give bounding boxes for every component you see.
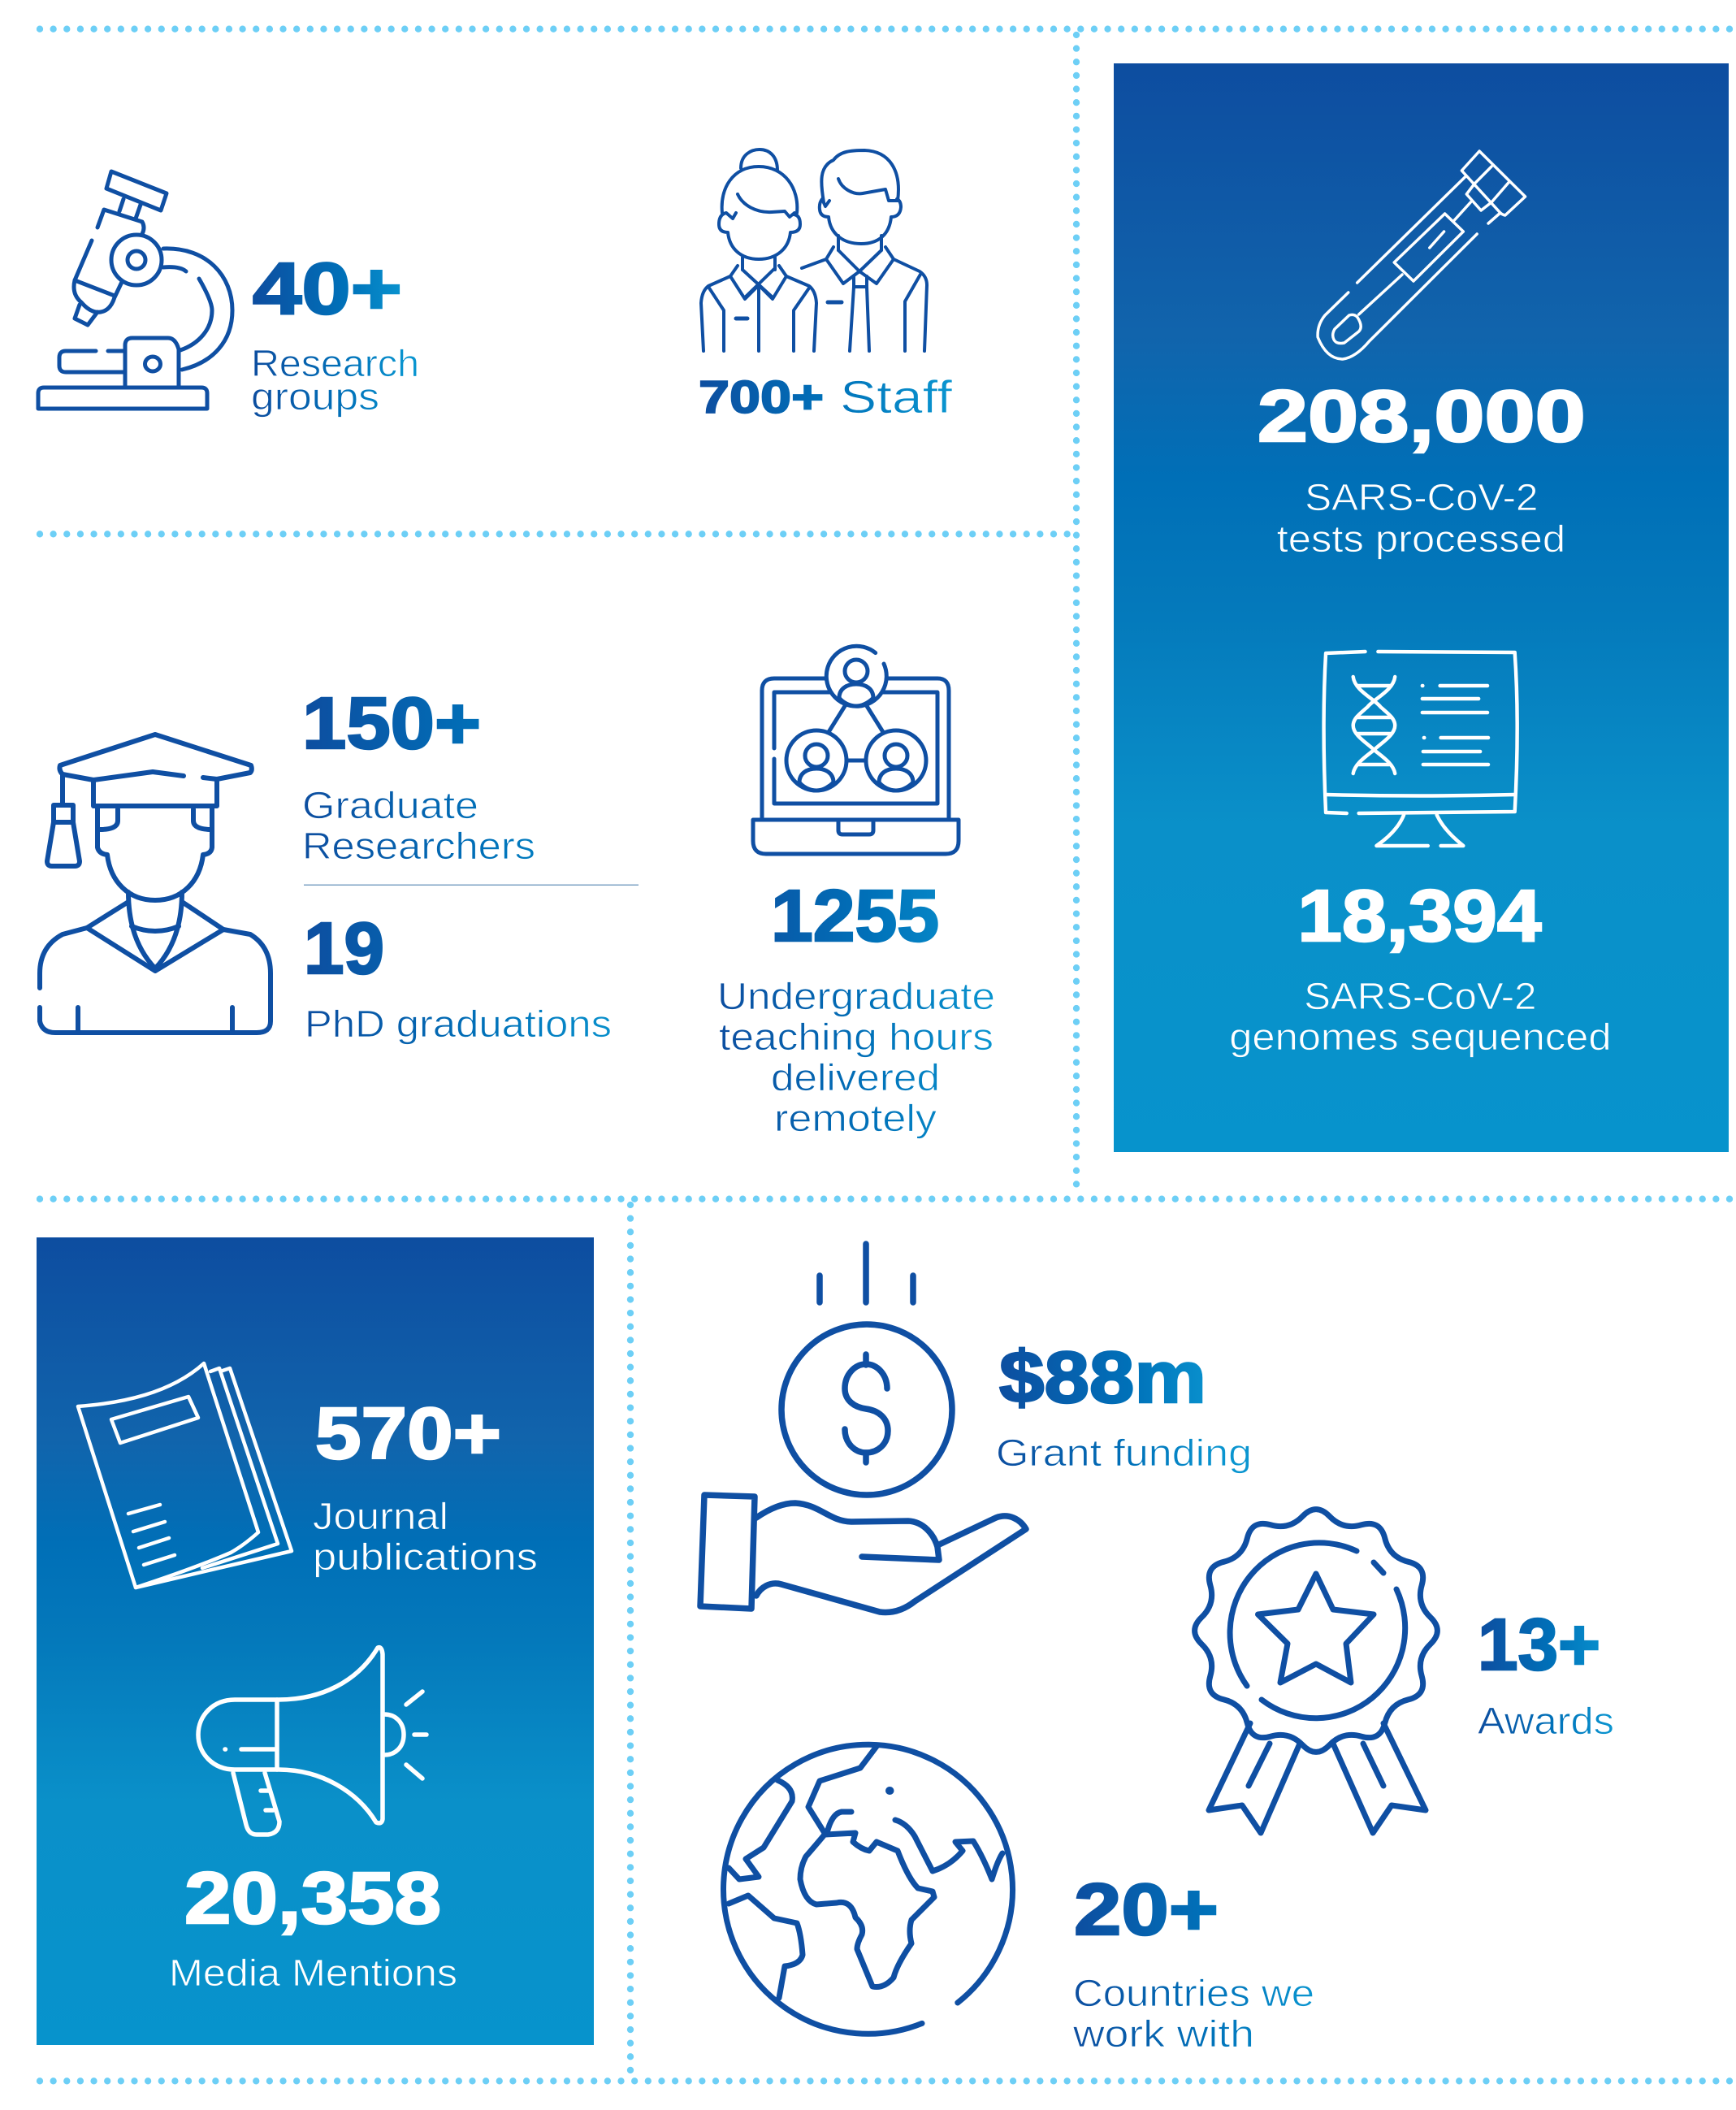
label: SARS-CoV-2 genomes sequenced: genomes sequenced: [1229, 1016, 1612, 1058]
icon: test tube with swab: [1318, 151, 1526, 359]
panel: staff: [699, 149, 952, 423]
panel background gradient: [1114, 63, 1729, 1152]
label: graduate researchers: Graduate: [302, 784, 478, 826]
label: countries we work with: work with: [1072, 2013, 1254, 2055]
label: research groups: Research: [251, 342, 419, 384]
panel: SARS-CoV-2 work: [1114, 63, 1729, 1152]
panel: awards: [1195, 1510, 1614, 1833]
icon: hand receiving coin: [700, 1244, 1026, 1612]
label: countries we work with: Countries we: [1073, 1972, 1314, 2014]
stat: 18,394: 18,394: [1297, 875, 1542, 956]
label: journal publications: publications: [313, 1536, 538, 1578]
panel: remote teaching: [717, 646, 995, 1139]
stat: $88m: $88m: [999, 1337, 1206, 1419]
panel: publications and media: [37, 1237, 594, 2045]
label: undergraduate teaching hours delivered remotely: delivered: [771, 1056, 940, 1098]
stat: 700+ Staff: 700+: [699, 371, 824, 423]
label: undergraduate teaching hours delivered remotely: Undergraduate: [717, 975, 995, 1017]
icon: monitor with DNA: [1324, 652, 1517, 846]
label: undergraduate teaching hours delivered remotely: teaching hours: [719, 1016, 994, 1058]
label: undergraduate teaching hours delivered remotely: remotely: [774, 1097, 937, 1139]
label: journal publications: Journal: [313, 1495, 448, 1537]
icon: graduate with cap: [40, 734, 271, 1033]
stat: 40+: 40+: [253, 249, 402, 330]
stat: 700+ Staff: Staff: [840, 371, 952, 423]
label: SARS-CoV-2 tests processed: tests processed: [1277, 518, 1565, 560]
stat: 20+: 20+: [1074, 1870, 1219, 1951]
panel: graduates: [40, 683, 639, 1045]
stat: 208,000: 208,000: [1258, 375, 1586, 457]
panel background gradient: [37, 1237, 594, 2045]
label: SARS-CoV-2 tests processed: SARS-CoV-2: [1305, 477, 1538, 518]
icon: megaphone: [198, 1648, 426, 1835]
icon: laptop with connected people: [753, 646, 959, 854]
stat: 13+: 13+: [1478, 1605, 1600, 1686]
stat: 20,358: 20,358: [184, 1858, 441, 1939]
label: media mentions: Media Mentions: [169, 1952, 457, 1994]
stat: 19: 19: [304, 908, 384, 990]
panel: research groups: [38, 171, 419, 418]
icon: microscope: [38, 171, 232, 409]
icon: globe: [724, 1744, 1013, 2034]
label: research groups: groups: [251, 375, 379, 418]
panel: grant funding: [700, 1244, 1252, 1612]
label: SARS-CoV-2 genomes sequenced: SARS-CoV-2: [1304, 976, 1536, 1017]
icon: two staff members: [701, 149, 927, 351]
divider: [304, 884, 639, 886]
label: PhD graduations: PhD graduations: [305, 1003, 612, 1045]
icon: rosette with star: [1195, 1510, 1437, 1833]
stat: 570+: 570+: [315, 1393, 501, 1475]
panel: countries: [724, 1744, 1314, 2055]
label: grant funding: Grant funding: [996, 1432, 1252, 1474]
stat: 150+: 150+: [302, 683, 481, 765]
label: graduate researchers: Researchers: [302, 825, 535, 867]
icon: journal: [78, 1363, 292, 1588]
stat: 1255: 1255: [771, 876, 939, 957]
label: awards: Awards: [1478, 1700, 1614, 1742]
